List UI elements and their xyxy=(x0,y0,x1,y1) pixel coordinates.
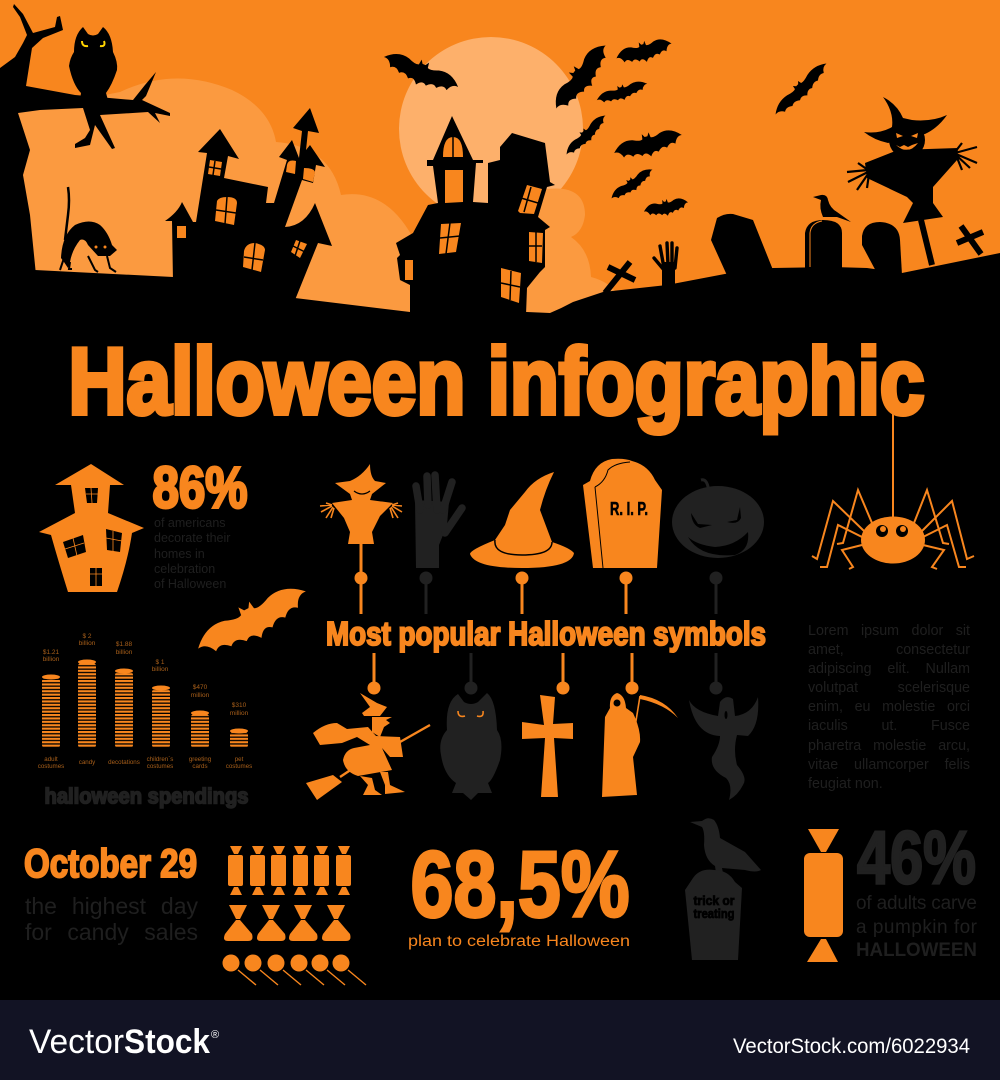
text block: lorem ipsum: adipiscing elit. Nullam xyxy=(808,661,970,677)
stat text: decorate homes: of americans xyxy=(154,516,226,530)
stat: 68,5%: 68,5% xyxy=(410,832,630,936)
value labels: $ 2 xyxy=(82,633,92,640)
symbol: R.I.P. tombstone: R. I. P. xyxy=(610,499,648,519)
category labels: costumes xyxy=(226,763,252,770)
text block: highest day: for candy sales xyxy=(25,919,198,945)
moon xyxy=(399,37,583,221)
value labels xyxy=(43,633,249,717)
category labels: costumes xyxy=(147,763,173,770)
clouds left xyxy=(18,78,412,330)
symbol: cross xyxy=(522,695,573,797)
value labels: $1.88 xyxy=(116,641,133,648)
connectors bottom row xyxy=(368,653,722,694)
value labels: billion xyxy=(116,649,133,656)
value labels: million xyxy=(191,692,210,699)
haunted house left xyxy=(165,108,332,300)
stat text: plan to celebrate: plan to celebrate Halloween xyxy=(408,933,630,950)
value labels: $1.21 xyxy=(43,649,60,656)
category labels: pet xyxy=(235,756,244,763)
candy pictogram xyxy=(222,846,366,985)
symbol: ghost xyxy=(689,697,758,800)
stat text: decorate homes: of Halloween xyxy=(154,577,226,591)
stack pet costumes xyxy=(230,728,248,748)
chart: halloween spendings coin stacks xyxy=(38,633,252,770)
category labels: greeting xyxy=(189,756,212,763)
chart heading: halloween spendings: halloween spendings xyxy=(44,784,248,808)
row: candy bags xyxy=(224,905,350,941)
category labels xyxy=(38,756,252,770)
symbol: pumpkin xyxy=(672,480,764,558)
icon: orange bat xyxy=(190,576,315,667)
bat 5 xyxy=(562,111,611,160)
value labels: $470 xyxy=(193,684,208,691)
bat 1 xyxy=(379,46,462,100)
row: wrapped candies xyxy=(228,846,351,895)
value labels: $ 1 xyxy=(155,659,165,666)
text block: lorem ipsum: enim, eu molestie orci xyxy=(808,699,970,715)
symbols heading: Most popular Halloween symbols xyxy=(326,615,766,652)
footer url: VectorStock.com/6022934 xyxy=(733,1035,970,1058)
text block: lorem ipsum xyxy=(808,623,970,792)
cat xyxy=(60,187,117,272)
symbol: witch on broom xyxy=(306,693,430,800)
stack adult costumes xyxy=(42,674,60,748)
symbol: dark owl xyxy=(440,693,501,800)
footer registered mark: ® xyxy=(211,1029,219,1041)
spider on thread xyxy=(812,413,974,569)
category labels: decotations xyxy=(108,759,140,766)
crosses and hand xyxy=(605,226,983,293)
stat text: adults carve: a pumpkin for xyxy=(856,917,978,938)
grave highlight xyxy=(810,221,822,267)
bats flock xyxy=(379,34,833,220)
sky xyxy=(0,0,1000,340)
bat 2 xyxy=(547,38,617,117)
icon: house xyxy=(39,464,144,592)
symbol: scarecrow xyxy=(320,464,402,544)
crow on grave xyxy=(813,195,851,222)
stack greeting cards xyxy=(191,710,209,748)
bat 8 xyxy=(642,195,690,220)
footer bar xyxy=(0,1000,1000,1080)
stack children's costumes xyxy=(152,686,170,748)
value labels: $310 xyxy=(232,702,247,709)
value labels: million xyxy=(230,710,249,717)
bat 3 xyxy=(614,34,674,69)
category labels: cards xyxy=(192,763,208,770)
connectors top row xyxy=(354,543,722,614)
symbol: witch hat xyxy=(470,472,574,568)
text block: lorem ipsum: iaculis ut. Fusce xyxy=(808,718,970,734)
stat: 86%: 86% xyxy=(152,456,248,520)
symbol: grim reaper xyxy=(602,693,678,797)
stack candy xyxy=(78,660,96,748)
category labels: costumes xyxy=(38,763,64,770)
bat 6 xyxy=(611,124,685,165)
category labels: candy xyxy=(79,759,96,766)
stat text: adults carve xyxy=(856,893,978,961)
text block: lorem ipsum: vitae ullamcorper felis xyxy=(808,757,970,773)
text block: lorem ipsum: volutpat scelerisque xyxy=(808,680,970,696)
icon: trick or treating tombstone: trick or xyxy=(694,894,735,908)
stack decorations xyxy=(115,668,133,748)
ground xyxy=(0,253,1000,340)
value labels: billion xyxy=(152,666,169,673)
footer logo: VectorStock xyxy=(29,1023,210,1061)
text block: lorem ipsum: pharetra molestie arcu, xyxy=(808,738,970,754)
value labels: billion xyxy=(43,656,60,663)
stat text: decorate homes: decorate their xyxy=(154,531,230,545)
stat text: adults carve: HALLOWEEN xyxy=(856,940,977,961)
stat text: decorate homes xyxy=(154,516,230,591)
bat 9 xyxy=(770,58,833,121)
haunted house center xyxy=(396,116,555,315)
scene: sky with silhouettes xyxy=(0,0,1000,340)
icon: trick or treating tombstone: treating xyxy=(694,907,734,921)
stat text: decorate homes: homes in xyxy=(154,547,205,561)
symbol: zombie hand xyxy=(415,475,462,568)
bat 4 xyxy=(595,77,650,108)
stat text: decorate homes: celebration xyxy=(154,562,215,576)
symbol: R.I.P. tombstone xyxy=(583,459,662,568)
category labels: adult xyxy=(44,756,58,763)
scarecrow xyxy=(847,97,977,265)
icon: dark crow xyxy=(690,818,761,873)
text block: lorem ipsum: amet, consectetur xyxy=(808,642,970,658)
row: lollipops xyxy=(222,954,366,985)
text block: lorem ipsum: feugiat non. xyxy=(808,776,883,792)
clouds right xyxy=(520,188,620,330)
tree with branch xyxy=(0,4,170,300)
text block: lorem ipsum: Lorem ipsum dolor sit xyxy=(808,623,970,639)
owl xyxy=(69,27,117,100)
bat 7 xyxy=(608,164,657,204)
stat text: adults carve: of adults carve xyxy=(856,893,977,914)
icon: big candy xyxy=(804,829,843,962)
gravestones xyxy=(711,214,902,282)
value labels: billion xyxy=(79,640,96,647)
icon: trick or treating tombstone xyxy=(685,870,742,960)
heading: October 29: October 29 xyxy=(24,842,197,886)
text block: highest day: the highest day xyxy=(25,893,198,919)
category labels: children`s xyxy=(147,756,173,763)
text block: highest day xyxy=(25,893,198,945)
